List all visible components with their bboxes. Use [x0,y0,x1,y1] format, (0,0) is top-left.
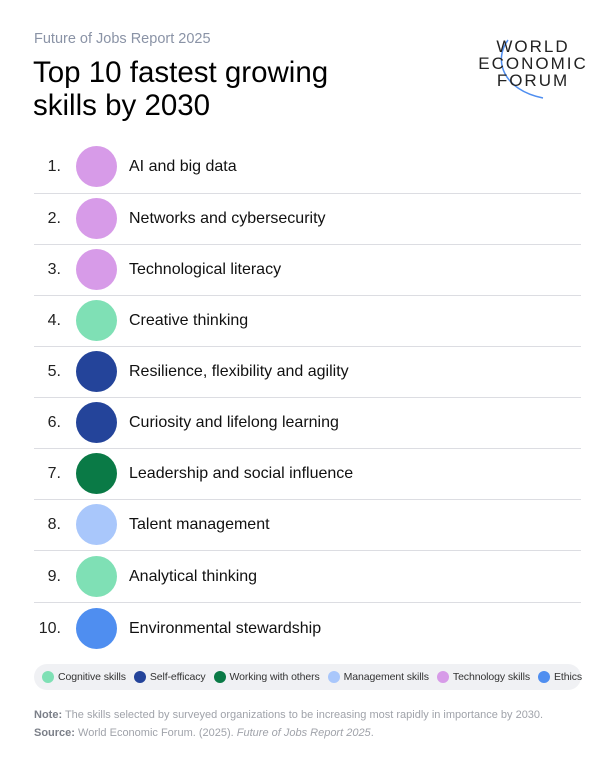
note: Note: The skills selected by surveyed organizations to be increasing most rapidly in importance by 2030. [34,709,543,721]
row 2 [48,198,326,239]
note [34,709,543,739]
logo: FORUM [497,71,569,90]
row 10: Environmental stewardship [129,620,321,637]
row 8: Talent management [129,516,270,533]
row 4 [48,300,248,341]
legend: Working with others [230,671,320,683]
row 2: 2. [48,210,61,227]
row 7 [48,453,353,494]
row 3 [48,249,282,290]
row 1: AI and big data [129,158,237,175]
row 8: 8. [48,516,61,533]
row 2: Networks and cybersecurity [129,210,326,227]
row 3: 3. [48,261,61,278]
row 6 [48,402,339,443]
logo: WORLD [496,37,570,56]
title [33,56,328,122]
row 4: 4. [48,312,61,329]
row 6: 6. [48,414,61,431]
row 7: 7. [48,465,61,482]
legend: Self-efficacy [150,671,206,683]
row 1: 1. [48,158,61,175]
legend: Ethics [554,671,582,683]
title: skills by 2030 [33,89,210,122]
legend: Technology skills [453,671,530,683]
legend [34,664,581,690]
row 5: 5. [48,363,61,380]
legend: Cognitive skills [58,671,126,683]
row 3: Technological literacy [129,261,281,278]
row 7: Leadership and social influence [129,465,353,482]
logo [478,37,588,99]
row 5 [48,351,349,392]
row 1 [48,146,237,187]
note: Source: World Economic Forum. (2025). Future of Jobs Report 2025. [34,727,374,739]
row 10 [39,608,321,649]
subtitle: Future of Jobs Report 2025 [34,31,211,47]
row 9 [48,556,257,597]
row 10: 10. [39,620,61,637]
title: Top 10 fastest growing [33,56,328,89]
list of skills [34,146,581,649]
row 8 [48,504,270,545]
row 9: 9. [48,568,61,585]
row 6: Curiosity and lifelong learning [129,414,339,431]
row 9: Analytical thinking [129,568,257,585]
row 4: Creative thinking [129,312,248,329]
legend: Management skills [344,671,429,683]
logo: ECONOMIC [478,54,588,73]
row 5: Resilience, flexibility and agility [129,363,349,380]
